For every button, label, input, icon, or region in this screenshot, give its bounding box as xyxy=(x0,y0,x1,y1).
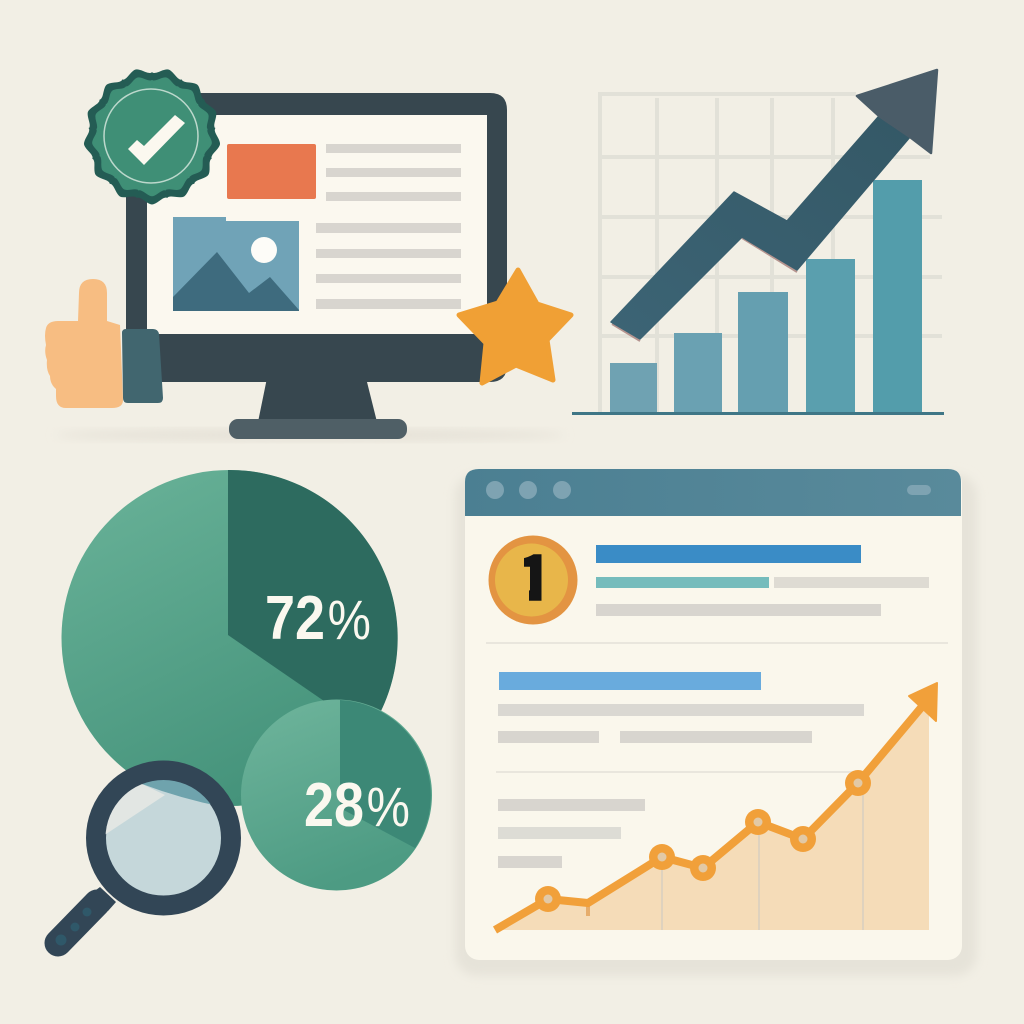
rank 1 medal: 1 xyxy=(516,528,554,618)
panel: growth bar chart with arrow xyxy=(572,70,944,415)
area line chart xyxy=(495,683,937,930)
second search result xyxy=(498,672,864,743)
monitor frame xyxy=(126,93,507,382)
label 72%: 72% xyxy=(265,584,371,653)
monitor screen xyxy=(147,115,487,334)
top search result xyxy=(596,545,929,616)
icon: thumbs up xyxy=(45,279,163,408)
icon: quality badge with check xyxy=(83,66,221,204)
text lines, top xyxy=(316,144,461,309)
panel: pie charts xyxy=(56,470,432,946)
trend arrow xyxy=(611,70,937,341)
label 28%: 28% xyxy=(304,771,410,840)
browser title bar xyxy=(465,469,961,516)
chart grid xyxy=(598,94,942,412)
rank 1 medal xyxy=(488,528,578,624)
third result lines xyxy=(498,799,645,868)
panel: browser window xyxy=(455,469,977,976)
icon: magnifying glass xyxy=(56,770,240,946)
small pie chart xyxy=(241,700,432,890)
chart baseline xyxy=(572,412,944,415)
bars xyxy=(610,180,922,413)
monitor stand xyxy=(229,378,407,439)
panel: monitor with badge, star and thumbs up xyxy=(45,66,571,441)
image placeholder xyxy=(173,217,299,311)
browser body xyxy=(465,469,962,960)
large pie chart xyxy=(62,470,398,806)
orange content block xyxy=(227,144,316,199)
icon: star xyxy=(459,270,571,383)
